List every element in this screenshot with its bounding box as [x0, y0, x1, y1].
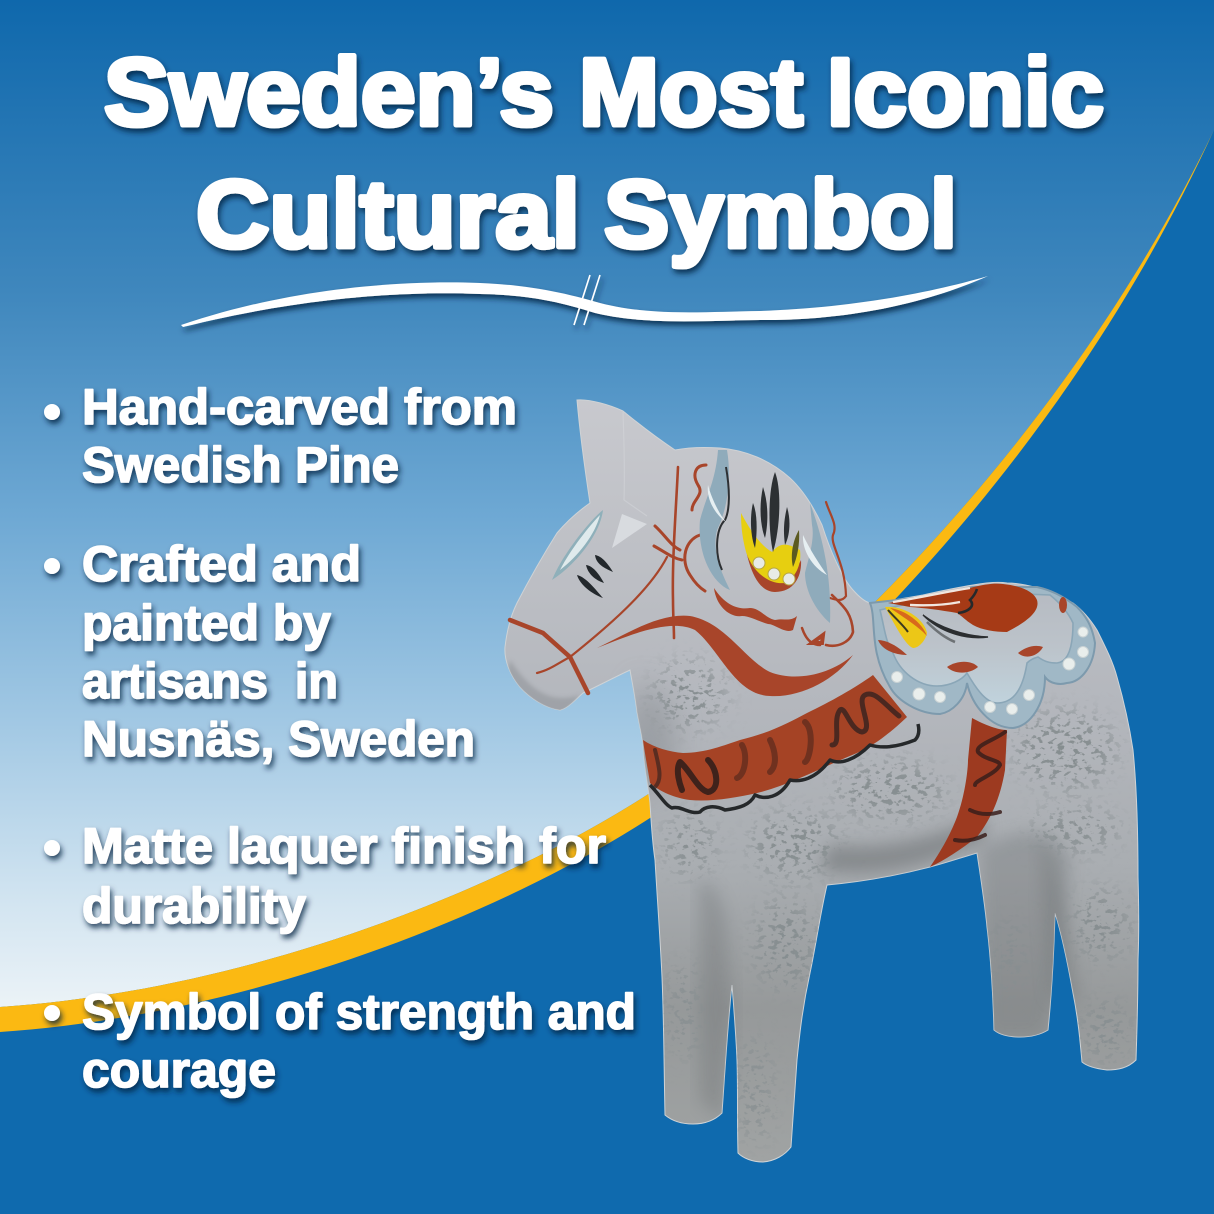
- bridle lines: [510, 465, 706, 693]
- bullet: crafted and painted: artisans in: [82, 653, 338, 709]
- bullet: hand-carved: [44, 379, 517, 493]
- bullet: matte lacquer: durability: [82, 878, 306, 934]
- muzzle highlight: [612, 514, 647, 548]
- saddle scallop inner field: [880, 592, 1073, 703]
- bullet: matte lacquer: Matte laquer finish for: [82, 818, 606, 874]
- bullet: crafted and painted: painted by: [82, 595, 331, 651]
- head flower: [741, 472, 801, 592]
- neck swoosh: [597, 616, 853, 696]
- bullet: crafted and painted: [44, 536, 475, 767]
- yellow curved band: [0, 130, 1214, 1032]
- bullet: crafted and painted: Nusnäs, Sweden: [82, 711, 475, 767]
- saddle blanket: [870, 584, 1095, 728]
- title: Cultural: [196, 161, 580, 268]
- collar fringe: [650, 724, 919, 813]
- right mane: [803, 503, 830, 623]
- eye: [552, 510, 603, 580]
- saddle dots: [892, 627, 1088, 714]
- saddle feather: [885, 607, 927, 648]
- bullet list: [44, 379, 636, 1098]
- dala horse illustration: [500, 400, 1139, 1162]
- bullet: matte lacquer: [44, 818, 606, 934]
- saddle black brush strokes: [923, 615, 988, 638]
- bullet: symbol of strength: courage: [82, 1042, 276, 1098]
- saddle red top: [888, 584, 1038, 632]
- bullet: symbol of strength: [44, 984, 636, 1098]
- title: Sweden’s: [104, 39, 554, 146]
- left mane: [700, 450, 730, 590]
- girth strap: [930, 718, 1007, 867]
- mane scroll: [714, 588, 797, 631]
- bullet: hand-carved: Hand-carved from: [82, 379, 517, 435]
- title: Symbol: [604, 161, 957, 268]
- saddle red spots: [878, 597, 1067, 673]
- nose marks: [577, 555, 613, 598]
- bullet: hand-carved: Swedish Pine: [82, 437, 399, 493]
- saddle scallop outer band: [870, 587, 1095, 728]
- horse body: [505, 400, 1139, 1162]
- horse shading and speckles: [500, 660, 1128, 1145]
- bullet: crafted and painted: Crafted and: [82, 536, 361, 592]
- mane flourish right: [802, 502, 853, 646]
- bullet: symbol of strength: Symbol of strength and: [82, 984, 636, 1040]
- title underline flourish: [181, 275, 988, 327]
- ear crease: [623, 412, 647, 516]
- title: [104, 39, 1104, 268]
- title: Iconic: [827, 39, 1104, 146]
- title: Most: [579, 39, 803, 146]
- collar band: [643, 675, 907, 801]
